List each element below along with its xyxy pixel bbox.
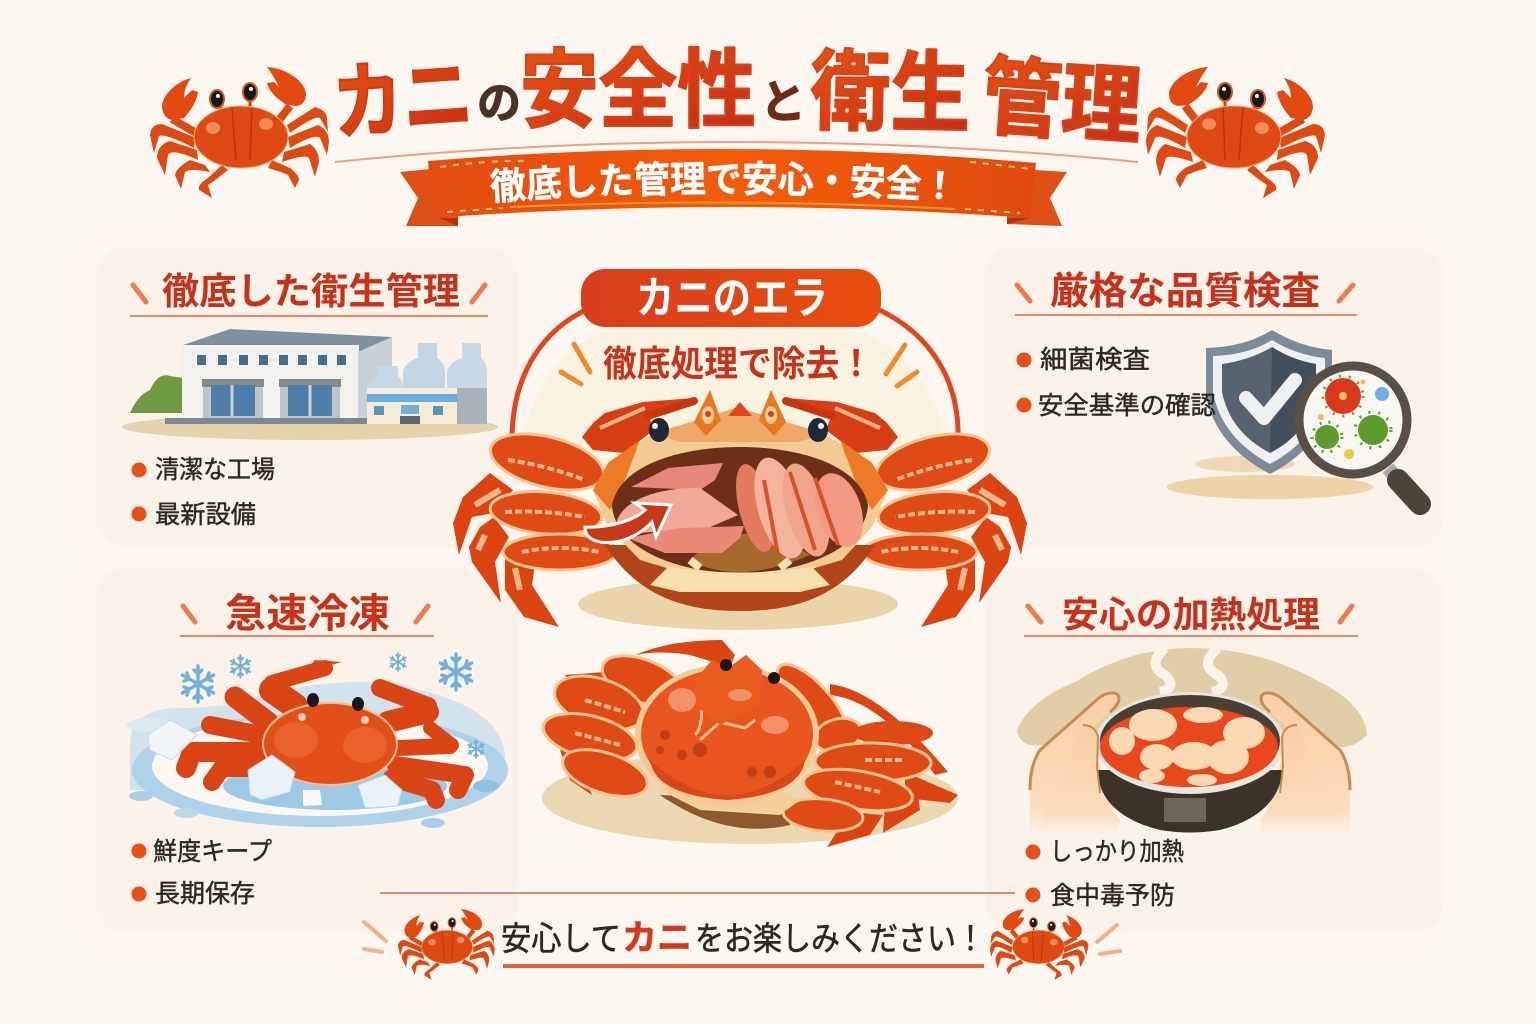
center gill illustration xyxy=(453,269,1027,630)
bullet list: freezing: 鮮度キープ xyxy=(153,838,272,866)
illustration: hot bowl in hands xyxy=(1017,648,1367,835)
title: カニ xyxy=(330,47,476,151)
crab eyes and ornaments xyxy=(649,390,828,442)
gills xyxy=(616,452,872,564)
title: の xyxy=(477,79,521,128)
bullet list: heating: しっかり加熱 xyxy=(1050,838,1184,866)
sand shadow xyxy=(578,578,898,630)
title: 安全性 xyxy=(520,43,756,139)
title: と xyxy=(760,76,806,128)
crab icon: top left xyxy=(150,67,329,198)
panel heading: safe heating: 安心の加熱処理 xyxy=(1062,594,1320,635)
center bottom crab illustration xyxy=(538,640,958,847)
bullet list: inspection: 安全基準の確認 xyxy=(1038,392,1216,420)
panel: hygiene management xyxy=(96,248,518,546)
subtitle ribbon: 徹底した管理で安心・安全！ xyxy=(490,160,944,204)
crab icon: bottom right xyxy=(990,909,1088,980)
arrow to gills xyxy=(585,503,671,543)
footer message xyxy=(364,893,1120,966)
title: 管理 xyxy=(979,49,1145,156)
text: thoroughly removed: 徹底処理で除去！ xyxy=(603,343,873,384)
bullet list: inspection: 細菌検査 xyxy=(1040,346,1150,374)
panel: quality inspection xyxy=(984,248,1443,546)
label pill: crab gills xyxy=(581,269,881,327)
title xyxy=(330,42,1145,156)
label pill: crab gills: カニのエラ xyxy=(636,274,828,323)
subtitle ribbon xyxy=(400,149,1067,226)
dome xyxy=(522,322,948,470)
panel heading: quick freezing xyxy=(180,592,434,636)
panel heading: hygiene management: 徹底した衛生管理 xyxy=(162,271,460,312)
divider curve xyxy=(335,142,1138,162)
bullet list: inspection xyxy=(1016,346,1216,420)
bullet list: hygiene: 清潔な工場 xyxy=(155,456,275,484)
footer message: をお楽しみください！ xyxy=(695,920,985,957)
bullet list: freezing xyxy=(132,838,272,908)
crab icon: bottom left xyxy=(398,909,495,980)
crab icon: top right xyxy=(1146,67,1325,198)
icon: factory xyxy=(122,329,498,440)
crab legs xyxy=(453,398,1027,627)
bullet list: heating: 食中毒予防 xyxy=(1050,882,1175,910)
bullet list: hygiene xyxy=(132,456,275,529)
bullet list: heating xyxy=(1026,838,1184,910)
icon: shield and magnifier xyxy=(1167,330,1420,504)
panel: quick freezing xyxy=(96,569,518,932)
panel: safe heating xyxy=(986,569,1443,932)
bullet list: hygiene: 最新設備 xyxy=(155,501,256,529)
crab body xyxy=(593,407,888,611)
footer message: 安心して xyxy=(501,920,621,957)
panel heading: quick freezing: 急速冷凍 xyxy=(225,592,390,636)
panel heading: quality inspection: 厳格な品質検査 xyxy=(1050,271,1320,313)
bullet list: freezing: 長期保存 xyxy=(155,880,255,908)
title: 衛生 xyxy=(810,42,971,144)
illustration: crab on ice xyxy=(126,653,508,828)
footer message: カニ xyxy=(622,919,692,958)
